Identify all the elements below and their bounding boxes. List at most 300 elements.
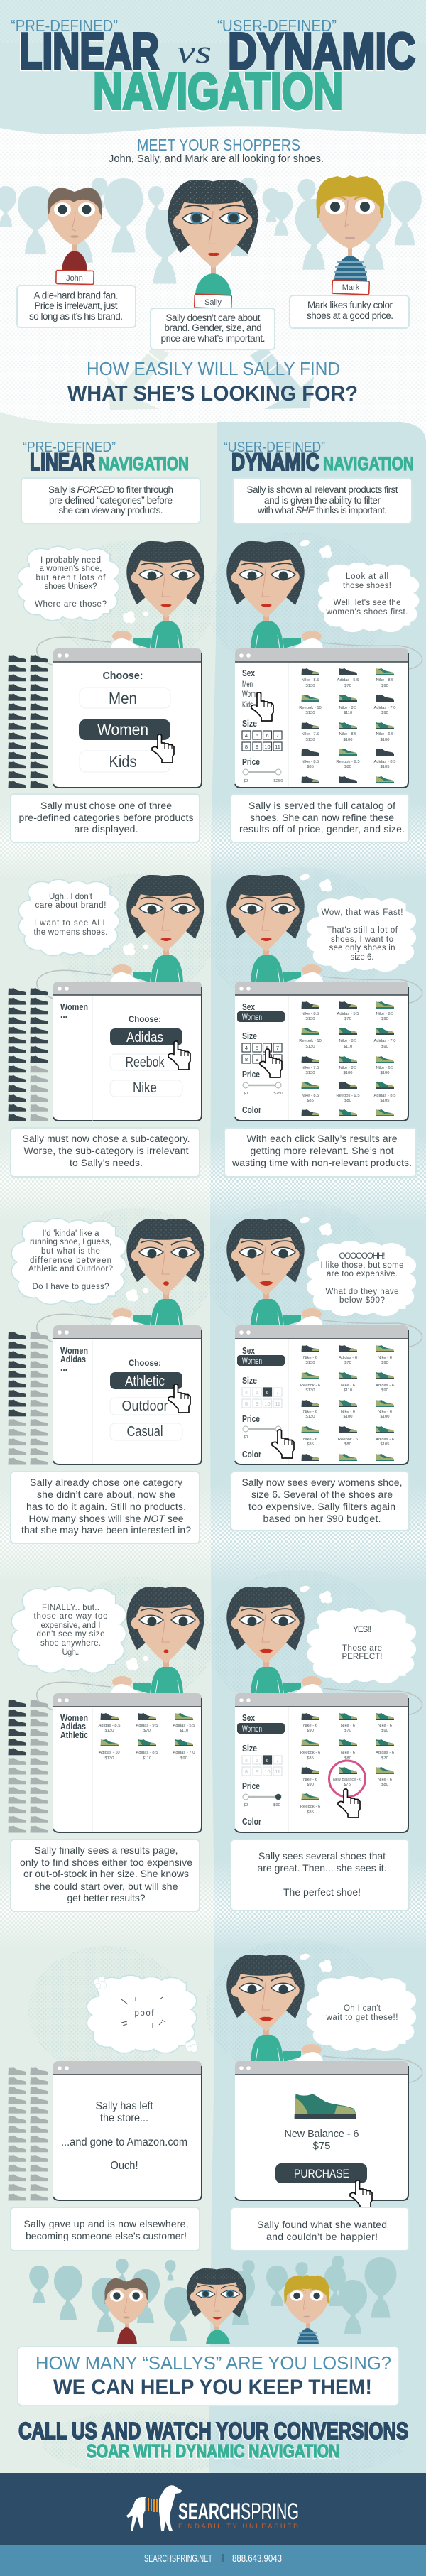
step 3 linear: browser window <box>53 1325 202 1464</box>
step 3 linear: browser window: Casual <box>126 1424 163 1440</box>
closing callout box <box>18 2347 399 2406</box>
step 1 dynamic: browser window with results: $70 <box>344 684 351 688</box>
step 4 linear: browser window with few results: Adidas <box>60 1722 86 1732</box>
step 5 dynamic: browser window with product <box>235 2061 408 2209</box>
step 3 linear: caption: How many shoes will she NOT see <box>28 1513 184 1524</box>
column heading: linear <box>23 440 189 476</box>
step 3 dynamic: thought bubble: below $90? <box>339 1296 385 1305</box>
step 2 linear: thought bubble: care about brand! <box>36 901 106 910</box>
step 2 linear: thought bubble: I want to see ALL <box>34 919 108 928</box>
step 3 dynamic: caption: size 6. Several of the shoes are <box>251 1489 393 1500</box>
step 3 linear: caption <box>11 1472 200 1543</box>
step 4 dynamic: thought bubble: Those are <box>342 1644 382 1653</box>
step 3 dynamic: browser window with results: $105 <box>381 1442 389 1447</box>
step 4 linear: browser window with few results <box>53 1693 202 1832</box>
step 2 dynamic: browser window with results: Reebok - 10 <box>299 1039 322 1043</box>
step 1 linear: browser window: Choose: <box>102 670 143 682</box>
step 5 dynamic: browser window with product: PURCHASE <box>294 2167 349 2180</box>
step 2 linear: caption: Worse, the sub-category is irrelevant <box>24 1145 189 1156</box>
bottom Mark <box>284 2275 329 2344</box>
heading: how easily: WHAT SHE’S LOOKING FOR? <box>67 382 358 406</box>
arrow: left <box>107 344 169 410</box>
step 1 dynamic: browser window with results: $130 <box>306 738 315 742</box>
step 4 linear: thought bubble: expensive, and I <box>41 1621 101 1630</box>
step 4 linear: caption <box>11 1839 200 1911</box>
step 5 linear: browser window <box>53 2061 202 2200</box>
step 3 linear: browser window: Women <box>60 1346 88 1356</box>
step 3 dynamic: thought bubble: are too expensive. <box>327 1270 398 1278</box>
step 2 dynamic: browser window with results: $105 <box>381 1099 389 1103</box>
step 2 linear: browser window <box>53 982 202 1121</box>
step 4 dynamic: browser window with highlighted shoe: $90 <box>273 1803 280 1808</box>
step 2 dynamic: thought bubble: That's still a lot of <box>327 926 398 935</box>
step 2 linear: browser window: Adidas <box>126 1030 163 1045</box>
step 2 dynamic: browser window with results: $90 <box>381 1017 388 1021</box>
step 4 linear: caption: or out-of-stock in her size. She knows <box>23 1868 189 1879</box>
step 3 linear: browser window: Athletic <box>125 1374 165 1389</box>
column heading: linear: “PRE-DEFINED” <box>23 440 116 455</box>
step 2 dynamic: browser window with results: $100 <box>344 1071 352 1075</box>
step 3 dynamic: browser window with results: Color <box>242 1450 261 1460</box>
step 4 dynamic: caption: The perfect shoe! <box>283 1886 361 1898</box>
step 3 dynamic: browser window with results <box>235 1325 408 1464</box>
step 5 dynamic: browser window with product: $75 <box>312 2140 331 2152</box>
call to action heading: SOAR WITH DYNAMIC NAVIGATION <box>87 2440 339 2462</box>
step 3 dynamic: browser window with results: $110 <box>344 1388 352 1393</box>
step 1 dynamic: browser window with results: Nike - 8.5 <box>302 678 319 683</box>
step 4 linear: browser window with few results: Adidas - 5.5 <box>173 1724 195 1728</box>
shopper: Sally: brand. Gender, size, and <box>165 322 261 333</box>
shopper: Mark <box>290 175 409 328</box>
step 3 dynamic: browser window with results: Reebok - 6 <box>338 1438 358 1442</box>
step 1 dynamic: Sally at computer <box>226 541 422 669</box>
step 2 linear: browser window: Nike <box>133 1080 157 1096</box>
step 1 dynamic: browser window with results: Reebok - 10 <box>299 706 322 710</box>
step 2 dynamic: browser window with results: Adidas - 5.5 <box>337 1012 359 1016</box>
step 4 dynamic: browser window with highlighted shoe: Color <box>242 1817 261 1827</box>
step 1 dynamic: browser window with results: $80 <box>344 765 351 769</box>
step 3 dynamic: thought bubble <box>299 1216 416 1316</box>
step 1 dynamic: thought bubble: women's shoes first. <box>325 608 408 616</box>
step 3 linear: shoe stack <box>9 1332 48 1464</box>
step 4 linear: browser window with few results: Women <box>60 1713 88 1723</box>
shopper: Mark: Mark <box>342 283 360 292</box>
step 4 linear: browser window with few results: $90 <box>180 1756 187 1761</box>
step 2 dynamic: browser window with results: $130 <box>306 1017 315 1021</box>
step 1 linear: caption: Sally must chose one of three <box>40 800 172 811</box>
step 1 dynamic: browser window with results: $0 <box>244 779 248 783</box>
step 1 dynamic: browser window with results: $105 <box>381 765 389 769</box>
heading: how easily <box>67 358 358 406</box>
step 2 linear: thought bubble: Ugh.. I don't <box>49 893 93 901</box>
step 2 dynamic: browser window with results: $70 <box>344 1017 351 1021</box>
step 4 linear: browser window with few results: $110 <box>143 1756 151 1761</box>
step 1 linear: caption: are displayed. <box>74 823 138 835</box>
title: NAVIGATION <box>93 64 343 120</box>
title: LINEAR <box>19 23 159 80</box>
step 4 dynamic: browser window with highlighted shoe: $90 <box>381 1729 388 1733</box>
step 2 dynamic: browser window with results: Price <box>242 1070 260 1080</box>
step 1 dynamic: caption <box>231 794 409 842</box>
step 3 dynamic: Sally at computer <box>226 1219 422 1347</box>
step 1 dynamic: browser window with results: Men <box>242 679 253 689</box>
step 2 dynamic: browser window with results: $250 <box>274 1092 283 1096</box>
step 2 dynamic: thought bubble: size 6. <box>351 953 373 962</box>
step 1 dynamic: browser window with results: Adidas - 8.5 <box>374 760 395 764</box>
step 4 dynamic: thought bubble <box>299 1585 416 1683</box>
step 3 linear: caption: she didn’t care about, now she <box>37 1489 175 1500</box>
step 4 linear: browser window with few results: $110 <box>180 1729 188 1733</box>
column heading: linear: NAVIGATION <box>99 453 189 474</box>
step 4 dynamic: caption: Sally sees several shoes that <box>258 1850 386 1862</box>
step 4 linear: browser window with few results: Adidas - 8.5 <box>136 1751 158 1755</box>
step 3 linear: thought bubble: I'd 'kinda' like a <box>43 1229 99 1238</box>
step 2 linear: browser window: Women <box>60 1002 88 1012</box>
step 5 dynamic: caption: Sally found what she wanted <box>257 2219 387 2230</box>
step 2 linear: browser window: ... <box>60 1010 67 1020</box>
step 3 dynamic: thought bubble: I like those, but some <box>321 1261 403 1270</box>
step 3 dynamic: caption: based on her $90 budget. <box>263 1513 381 1524</box>
call to action heading <box>18 2418 408 2462</box>
intro box: linear: she can view any products. <box>58 505 163 516</box>
step 4 linear: Sally at computer <box>37 1587 204 1710</box>
title: vs <box>177 33 212 70</box>
step 4 linear: caption: get better results? <box>67 1892 146 1903</box>
shopper: John <box>17 188 136 327</box>
step 1 linear: thought bubble: I probably need <box>40 556 101 565</box>
step 4 linear: thought bubble <box>12 1587 148 1673</box>
step 3 dynamic: browser window with results: Adidas - 6 <box>376 1438 394 1442</box>
step 2 dynamic: browser window with results: Sex <box>242 1002 255 1012</box>
heading: meet your shoppers: John, Sally, and Mark are all looking for shoes. <box>109 153 324 165</box>
step 3 dynamic: browser window with results: Nike - 6 <box>378 1410 392 1414</box>
step 2 dynamic: browser window with results: Nike - 8.5 <box>302 1012 319 1016</box>
step 1 linear: thought bubble: a women's shoe, <box>40 565 102 573</box>
shopper: Mark: Mark likes funky color <box>307 300 393 310</box>
intro box: linear <box>21 478 200 523</box>
step 4 dynamic: browser window with highlighted shoe: New Balance - 6 <box>333 1778 361 1782</box>
step 2 dynamic: caption: getting more relevant. She’s not <box>250 1145 394 1156</box>
step 4 linear: shoe stack <box>9 1700 48 1832</box>
step 2 dynamic: browser window with results: Nike - 6.5 <box>376 1066 393 1070</box>
step 3 dynamic: browser window with results: $0 <box>244 1435 248 1440</box>
footer logo band: FINDABILITY UNLEASHED <box>178 2523 298 2531</box>
step 1 linear: browser window: Men <box>109 689 137 707</box>
step 2 dynamic: browser window with results: $85 <box>307 1099 314 1103</box>
step 3 dynamic: browser window with results: $90 <box>381 1361 388 1365</box>
step 3 dynamic: browser window with results: Women <box>242 1356 262 1366</box>
column heading: dynamic: DYNAMIC <box>231 449 320 476</box>
step 2 dynamic: browser window with results: $80 <box>344 1099 351 1103</box>
step 4 linear: browser window with few results: $70 <box>143 1729 151 1733</box>
step 2 dynamic: browser window with results: Adidas - 7.0 <box>374 1039 395 1043</box>
step 1 linear: caption <box>11 794 200 842</box>
shopper: John: Price is irrelevant, just <box>34 300 118 311</box>
heading: meet your shoppers: MEET YOUR SHOPPERS <box>137 136 300 154</box>
step 5 dynamic: caption <box>231 2207 409 2251</box>
step 1 dynamic: browser window with results: $100 <box>344 738 352 742</box>
step 3 linear: Sally at computer <box>37 1219 204 1342</box>
step 2 linear: shoe stack <box>9 988 48 1121</box>
step 3 dynamic: thought bubble: What do they have <box>325 1288 399 1296</box>
step 3 dynamic: browser window with results: $80 <box>344 1442 351 1447</box>
heading: how easily: HOW EASILY WILL SALLY FIND <box>87 358 340 379</box>
step 4 dynamic: browser window with highlighted shoe: $90 <box>307 1729 314 1733</box>
bottom Sally <box>187 2268 246 2344</box>
step 4 linear: thought bubble: FINALLY.. but.. <box>42 1604 99 1612</box>
step 4 linear: browser window with few results: $130 <box>105 1756 114 1761</box>
shopper: Sally <box>151 180 275 349</box>
title: “USER-DEFINED” <box>217 16 337 35</box>
step 2 dynamic: browser window with results: Nike - 8.5 <box>339 1066 356 1070</box>
step 1 dynamic: thought bubble: Look at all <box>346 572 388 581</box>
step 3 linear: thought bubble: Do I have to guess? <box>33 1283 109 1291</box>
step 4 linear: browser window with few results: Adidas - 8.5 <box>99 1724 120 1728</box>
step 2 linear: Sally at computer <box>37 875 204 999</box>
step 1 dynamic: caption: Sally is served the full catalog of <box>248 800 395 811</box>
step 5 dynamic: Sally at computer <box>226 1955 422 2082</box>
step 2 linear: browser window: Choose: <box>129 1014 161 1024</box>
step 3 dynamic: browser window with results: $130 <box>306 1388 315 1393</box>
step 3 dynamic: browser window with results: Nike - 6 <box>303 1356 317 1360</box>
step 1 dynamic: browser window with results: Adidas - 5.5 <box>337 678 359 683</box>
step 2 dynamic: browser window with results: Nike - 8.5 <box>302 1094 319 1098</box>
step 4 dynamic: browser window with highlighted shoe: Nike - 6 <box>303 1778 317 1782</box>
step 1 dynamic: browser window with results: $90 <box>381 684 388 688</box>
step 2 dynamic: browser window with results: Reebok - 9.5 <box>336 1094 360 1098</box>
step 5 linear: poof bubble <box>87 1976 197 2053</box>
step 1 dynamic: caption: results off of price, gender, and size. <box>239 823 405 835</box>
step 4 linear: caption: she could start over, but will she <box>34 1881 178 1892</box>
step 2 linear: caption: Sally must now chose a sub-category. <box>23 1133 190 1144</box>
intro box: dynamic <box>233 478 412 523</box>
step 4 dynamic: browser window with highlighted shoe: Women <box>242 1724 262 1734</box>
step 4 linear: thought bubble: Ugh.. <box>62 1648 80 1657</box>
step 5 linear: caption: becoming someone else’s customer! <box>26 2230 187 2241</box>
step 2 dynamic: browser window with results: $130 <box>306 1071 315 1075</box>
step 3 linear: thought bubble: but what is the <box>41 1247 100 1256</box>
step 2 dynamic: caption: wasting time with non-relevant products. <box>231 1157 412 1168</box>
step 1 dynamic: browser window with results: Price <box>242 757 260 767</box>
step 4 dynamic: browser window with highlighted shoe: Nike - 6 <box>378 1778 392 1782</box>
step 2 dynamic: browser window with results: $90 <box>381 1045 388 1049</box>
step 4 dynamic: browser window with highlighted shoe: Nike - 6 <box>341 1751 355 1755</box>
shopper: John: so long as it’s his brand. <box>29 311 123 322</box>
step 1 dynamic: browser window with results: Sex <box>242 668 255 678</box>
step 4 dynamic: browser window with highlighted shoe: Nike - 6 <box>378 1724 392 1728</box>
step 4 dynamic: caption <box>231 1839 409 1911</box>
step 1 linear: thought bubble: but aren't lots of <box>36 574 106 582</box>
step 3 linear: thought bubble: Athletic and Outdoor? <box>28 1265 113 1273</box>
shopper: Mark: shoes at a good price. <box>307 310 393 321</box>
step 1 dynamic: browser window with results: $250 <box>274 779 283 783</box>
step 4 dynamic: browser window with highlighted shoe: Reebok - 6 <box>300 1751 320 1755</box>
shopper: John: John <box>66 274 83 283</box>
step 4 dynamic: Sally at computer <box>226 1587 422 1714</box>
step 2 dynamic: thought bubble <box>299 873 416 972</box>
footer logo band <box>0 2473 426 2545</box>
shopper: Sally: Sally <box>204 298 222 307</box>
step 3 dynamic: thought bubble: OOOOOOHH! <box>339 1252 385 1261</box>
title <box>11 16 415 120</box>
column heading: linear: LINEAR <box>30 449 95 476</box>
step 2 dynamic: caption <box>224 1128 416 1177</box>
step 4 dynamic: thought bubble: YES!! <box>353 1626 371 1634</box>
footer contact band: SEARCHSPRING.NET <box>144 2553 212 2565</box>
step 4 linear: thought bubble: those are way too <box>34 1612 108 1621</box>
step 2 dynamic: browser window with results <box>235 982 408 1121</box>
step 1 linear: thought bubble: shoes Unisex? <box>44 582 97 591</box>
step 2 dynamic: browser window with results: Color <box>242 1105 261 1115</box>
step 2 dynamic: browser window with results: Nike - 8.5 <box>376 1012 393 1016</box>
header band with wavy bottom <box>0 0 426 134</box>
step 1 dynamic: browser window with results: Kids <box>242 700 253 710</box>
step 2 dynamic: thought bubble: shoes, I want to <box>331 935 393 944</box>
step 1 dynamic: browser window with results <box>235 648 408 788</box>
step 4 dynamic: browser window with highlighted shoe: $70 <box>344 1729 351 1733</box>
step 1 linear: shoe stack <box>9 655 48 788</box>
step 4 dynamic: browser window with highlighted shoe: Size <box>242 1744 257 1754</box>
step 4 linear: caption: only to find shoes either too expensive <box>20 1857 192 1868</box>
step 3 dynamic: browser window with results: Reebok - 6 <box>300 1384 320 1388</box>
step 3 dynamic: browser window with results: $100 <box>344 1415 352 1419</box>
step 1 dynamic: browser window with results: Nike - 8.5 <box>339 706 356 710</box>
intro box: linear: Sally is FORCED to filter through <box>48 484 173 495</box>
step 3 dynamic: caption: too expensive. Sally filters again <box>248 1501 395 1512</box>
step 3 dynamic: browser window with results: $85 <box>307 1442 314 1447</box>
step 2 dynamic: browser window with results: $130 <box>306 1045 315 1049</box>
step 3 linear: caption: Sally already chose one category <box>30 1477 182 1488</box>
shopper: Sally: price are what’s important. <box>160 333 266 344</box>
step 4 dynamic: browser window with highlighted shoe: $75 <box>344 1783 351 1787</box>
step 1 dynamic: browser window with results: $130 <box>306 711 315 715</box>
step 2 linear: caption <box>11 1128 200 1177</box>
step 3 linear: browser window: Outdoor <box>122 1398 168 1414</box>
step 3 dynamic: browser window with results: Sex <box>242 1346 255 1356</box>
step 1 dynamic: browser window with results: $85 <box>307 765 314 769</box>
step 2 dynamic: browser window with results: Adidas - 8.5 <box>374 1094 395 1098</box>
step 4 dynamic: browser window with highlighted shoe: Price <box>242 1781 260 1791</box>
step 2 dynamic: browser window with results: Nike - 7.5 <box>302 1066 319 1070</box>
step 4 linear: browser window with few results: $130 <box>105 1729 114 1733</box>
shopper: Sally: Sally doesn’t care about <box>166 313 261 323</box>
footer contact band: 888.643.9043 <box>232 2553 282 2565</box>
step 1 dynamic: browser window with results: Nike - 8.5 <box>302 760 319 764</box>
step 1 dynamic: browser window with results: Adidas - 7.0 <box>374 706 395 710</box>
step 3 linear: caption: has to do it again. Still no products. <box>26 1501 186 1512</box>
step 1 linear: thought bubble: Where are those? <box>35 600 106 609</box>
bottom crowd silhouettes <box>29 2256 396 2341</box>
step 2 dynamic: browser window with results: $0 <box>244 1092 248 1096</box>
step 5 linear: browser window: Ouch! <box>111 2160 138 2172</box>
step 5 dynamic: caption: and couldn’t be happier! <box>266 2231 378 2242</box>
step 2 dynamic: Sally at computer <box>226 875 422 1003</box>
step 1 linear: browser window: Kids <box>109 752 136 771</box>
step 2 dynamic: browser window with results: Nike - 8.5 <box>339 1039 356 1043</box>
arrow: right <box>250 347 314 409</box>
step 1 dynamic: browser window with results: Nike - 7.5 <box>302 732 319 737</box>
step 4 linear: thought bubble: shoe anywhere. <box>40 1639 101 1648</box>
step 1 dynamic: browser window with results: $90 <box>381 711 388 715</box>
step 4 linear: browser window with few results: Adidas - 10 <box>99 1751 120 1755</box>
step 2 dynamic: browser window with results: Size <box>242 1031 257 1041</box>
step 5 dynamic: browser window with product: New Balance - 6 <box>284 2128 359 2140</box>
step 2 dynamic: browser window with results: $110 <box>344 1045 352 1049</box>
step 3 dynamic: browser window with results: $70 <box>344 1361 351 1365</box>
shopper: John: A die-hard brand fan. <box>34 290 118 301</box>
footer logo band: SEARCH <box>178 2499 241 2524</box>
step 1 linear: Sally at computer <box>37 541 204 665</box>
step 4 dynamic: browser window with highlighted shoe: Nike - 6 <box>303 1724 317 1728</box>
step 5 linear: browser window: Sally has left <box>95 2100 153 2112</box>
step 5 dynamic: thought bubble <box>299 1952 416 2051</box>
step 1 dynamic: browser window with results: $100 <box>381 738 389 742</box>
step 1 dynamic: browser window with results: Size <box>242 719 257 729</box>
step 2 linear: caption: to Sally’s needs. <box>70 1157 143 1168</box>
step 4 dynamic: caption: are great. Then... she sees it. <box>257 1862 386 1874</box>
step 2 dynamic: browser window with results: Women <box>242 1012 262 1022</box>
step 3 dynamic: caption: Sally now sees every womens shoe, <box>241 1477 402 1488</box>
step 3 dynamic: browser window with results: Size <box>242 1376 257 1386</box>
step 1 dynamic: thought bubble: Well, let's see the <box>334 599 400 607</box>
step 5 linear: browser window: ...and gone to Amazon.com <box>61 2136 187 2148</box>
closing callout box: HOW MANY “SALLYS” ARE YOU LOSING? <box>36 2352 391 2374</box>
step 2 dynamic: browser window with results: $100 <box>381 1071 389 1075</box>
step 4 dynamic: browser window with highlighted shoe: $70 <box>381 1756 388 1761</box>
step 2 dynamic: thought bubble: Wow, that was Fast! <box>321 908 403 917</box>
closing callout box: WE CAN HELP YOU KEEP THEM! <box>53 2376 372 2399</box>
footer logo band: SPRING <box>241 2499 299 2524</box>
step 4 linear: thought bubble: don't see my size <box>37 1630 105 1638</box>
step 1 dynamic: browser window with results: Reebok - 9.5 <box>336 760 360 764</box>
step 3 dynamic: browser window with results: Adidas - 6 <box>376 1384 394 1388</box>
step 1 dynamic: browser window with results: Nike - 8.5 <box>376 678 393 683</box>
step 4 linear: browser window with few results: Athletic <box>60 1730 88 1740</box>
step 4 dynamic: browser window with highlighted shoe: Reebok - 6 <box>300 1805 320 1809</box>
step 4 dynamic: browser window with highlighted shoe: $90 <box>307 1783 314 1787</box>
title: “PRE-DEFINED” <box>11 16 118 35</box>
crowd silhouettes <box>0 178 422 284</box>
step 3 dynamic: browser window with results: Nike - 6 <box>341 1384 355 1388</box>
intro box: dynamic: and is given the ability to filter <box>264 495 381 506</box>
footer contact band <box>0 2545 426 2576</box>
step 3 linear: browser window: Adidas <box>60 1354 86 1364</box>
step 1 dynamic: thought bubble: those shoes! <box>343 582 391 590</box>
heading: meet your shoppers <box>109 136 324 165</box>
step 3 linear: browser window: Choose: <box>129 1358 161 1368</box>
step 1 linear: thought bubble <box>18 547 148 624</box>
step 4 linear: browser window with few results: Adidas - 7.0 <box>173 1751 195 1755</box>
bottom John <box>104 2278 148 2344</box>
column heading: dynamic: “USER-DEFINED” <box>224 440 325 455</box>
step 1 dynamic: browser window with results: Nike - 8.5 <box>339 732 356 737</box>
step 5 linear: caption <box>11 2207 200 2251</box>
step 1 linear: caption: pre-defined categories before products <box>18 812 193 823</box>
step 1 dynamic: browser window with results: $130 <box>306 684 315 688</box>
step 2 linear: thought bubble <box>19 880 148 956</box>
step 3 linear: thought bubble: running shoe, I guess, <box>30 1238 111 1246</box>
step 1 dynamic: browser window with results: $110 <box>344 711 352 715</box>
step 3 dynamic: browser window with results: $100 <box>381 1415 389 1419</box>
step 4 dynamic: browser window with highlighted shoe: $0 <box>244 1803 248 1808</box>
step 4 dynamic: browser window with highlighted shoe: Adidas - 6 <box>376 1751 394 1755</box>
step 4 dynamic: browser window with highlighted shoe: $80 <box>381 1783 388 1787</box>
step 2 dynamic: caption: With each click Sally’s results are <box>247 1133 398 1144</box>
step 1 dynamic: browser window with results: Nike - 6.5 <box>376 732 393 737</box>
step 4 linear: browser window with few results: Adidas - 9.5 <box>136 1724 158 1728</box>
step 1 linear: browser window <box>53 648 202 788</box>
intro box: linear: pre-defined “categories” before <box>49 495 173 506</box>
